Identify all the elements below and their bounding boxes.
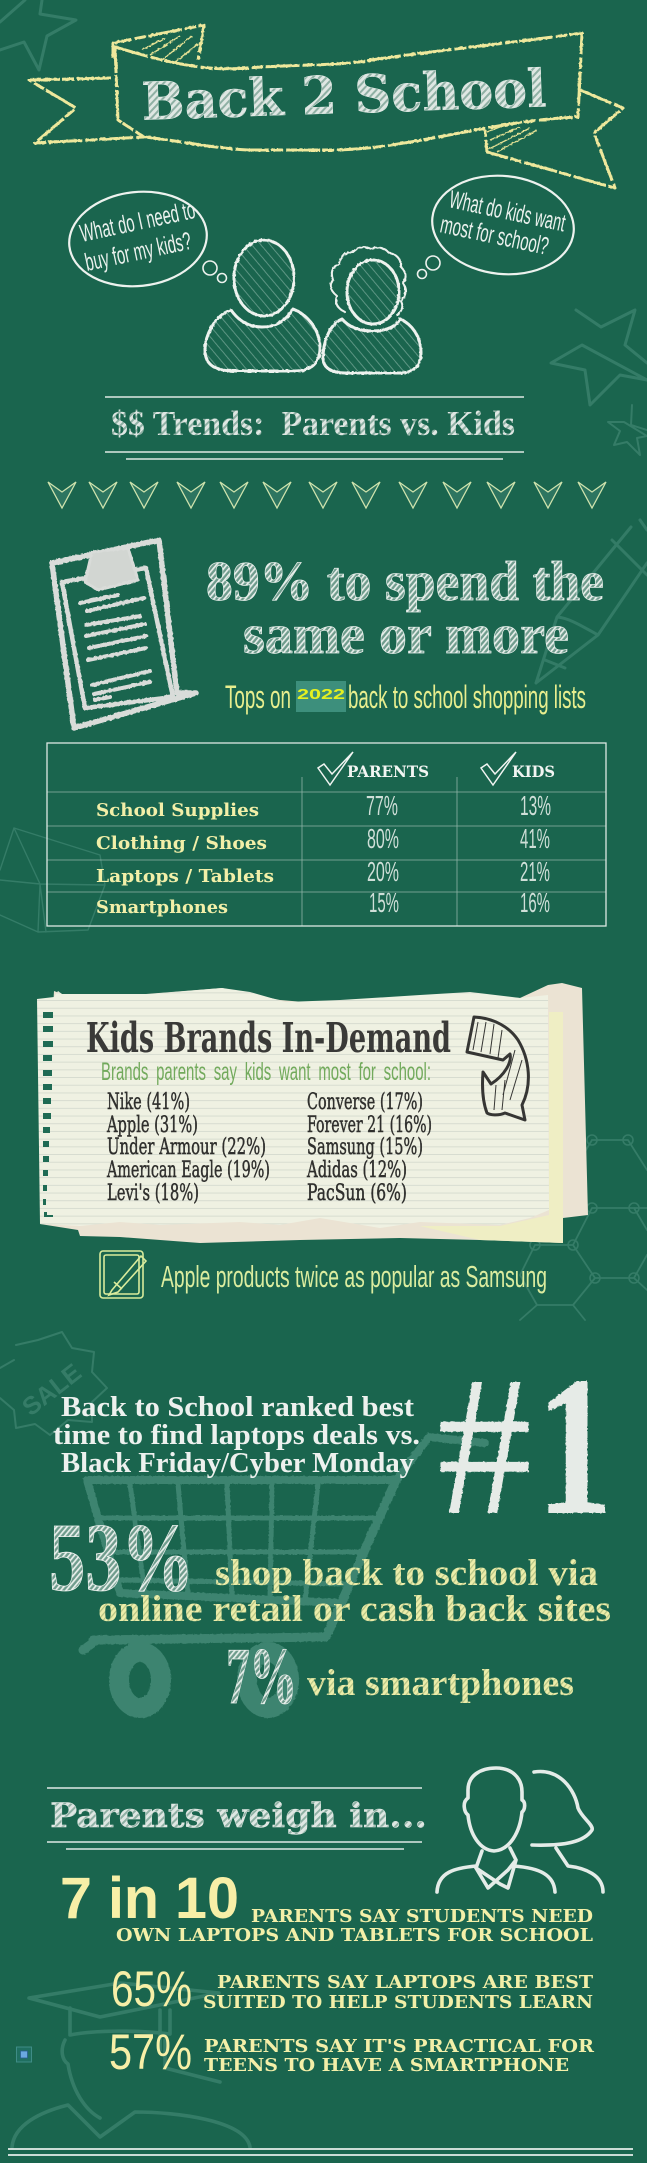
stat: 53%: online retail or cash back sites	[98, 1589, 611, 1630]
thought bubble: kid	[418, 169, 579, 281]
text: best time to find laptops: time to find laptops deals vs.	[53, 1419, 420, 1451]
decoration: graduate	[12, 1983, 250, 2147]
table	[47, 743, 606, 926]
stat: 7%	[226, 1633, 574, 1721]
stat: 7 in 10: PARENTS SAY STUDENTS NEED	[251, 1906, 593, 1927]
brand list: right column	[306, 1090, 432, 1206]
stat: 7 in 10: 7 in 10	[60, 1866, 239, 1931]
decoration: shopping cart	[83, 1437, 485, 1708]
table values: 16%	[520, 887, 550, 918]
table header: parents: PARENTS	[347, 762, 429, 781]
thought bubble: kid: most for school?	[438, 210, 551, 261]
stat: 57%: PARENTS SAY IT'S PRACTICAL FOR	[204, 2036, 595, 2057]
stat: 57%: TEENS TO HAVE A SMARTPHONE	[204, 2055, 569, 2076]
callout: apple vs samsung	[100, 1251, 547, 1298]
stat: 53%: 53%	[49, 1504, 194, 1612]
stat: #1	[437, 1336, 613, 1557]
stat: 7%: 7%	[226, 1633, 297, 1721]
icon: clipboard	[52, 540, 196, 728]
brand list: left column: Levi's (18%)	[107, 1181, 199, 1206]
table rows: Clothing / Shoes	[96, 833, 267, 854]
brand list: right column: PacSun (6%)	[307, 1181, 407, 1206]
table values: 21%	[520, 856, 550, 887]
table values: 13%	[520, 790, 551, 821]
brand list: left column: Under Armour (22%)	[107, 1135, 266, 1160]
stat: 65%	[111, 1961, 594, 2017]
table rows	[96, 800, 274, 918]
headline: 89%: same or more	[243, 604, 569, 666]
heading: parents weigh in	[47, 1788, 427, 1849]
icon: parent figure	[205, 240, 320, 371]
panel: torn notebook paper	[37, 983, 588, 1243]
banner ribbon outline	[29, 25, 623, 188]
text: best time to find laptops: Black Friday/Cyber Monday	[61, 1447, 414, 1479]
subtitle: trends: $$ Trends: Parents vs. Kids	[111, 404, 515, 443]
brand list: right column: Samsung (15%)	[307, 1135, 423, 1160]
stat: #1: #	[437, 1336, 532, 1557]
stat: 7 in 10: OWN LAPTOPS AND TABLETS FOR SCHOOL	[116, 1925, 593, 1946]
stat: 7%: via smartphones	[307, 1663, 574, 1704]
decoration: sale badge	[0, 1332, 107, 1435]
subheading: tops on 2022 lists	[225, 679, 586, 715]
footer lines	[8, 2149, 633, 2155]
table values: 15%	[369, 887, 399, 918]
decoration: hexagons	[520, 1135, 647, 1320]
stat: 65%: SUITED TO HELP STUDENTS LEARN	[203, 1992, 593, 2013]
icon: curved arrow	[467, 1017, 528, 1120]
stat: #1: 1	[536, 1336, 613, 1557]
paper main sheet	[37, 988, 549, 1228]
brand list: left column: American Eagle (19%)	[106, 1158, 270, 1183]
table rows: School Supplies	[96, 800, 259, 821]
table values: 80%	[367, 823, 399, 854]
icon: note and pen	[100, 1251, 146, 1298]
brand list: left column: Apple (31%)	[106, 1113, 198, 1138]
title: Back 2 School	[141, 58, 547, 133]
table values: 41%	[520, 823, 550, 854]
stat: 57%	[109, 2024, 595, 2080]
heading: parents weigh in: Parents weigh in...	[50, 1796, 427, 1836]
brand list: left column	[106, 1090, 270, 1206]
brand list: right column: Adidas (12%)	[306, 1158, 407, 1183]
table header: kids	[481, 752, 555, 785]
table grid	[47, 743, 606, 926]
brand list: right column: Forever 21 (16%)	[307, 1113, 432, 1138]
stat: 57%: 57%	[109, 2024, 192, 2080]
subtitle: trends	[105, 397, 524, 459]
headline: 89%: 89% to spend the	[206, 551, 604, 613]
table rows: Smartphones	[96, 897, 228, 918]
table values: 77%	[366, 790, 398, 821]
thought bubble: parent: buy for my kids?	[82, 227, 194, 277]
title banner	[29, 25, 623, 188]
table rows: Laptops / Tablets	[96, 866, 274, 887]
stat: 65%: 65%	[111, 1961, 192, 2017]
stat: 7 in 10	[60, 1866, 593, 1946]
icon: parents outline	[437, 1768, 603, 1892]
subheading: tops on 2022 lists: Tops on	[225, 679, 291, 715]
decoration: dice	[0, 828, 105, 932]
table header: kids: KIDS	[512, 762, 555, 781]
icon: small blue square	[16, 2047, 32, 2062]
table values	[366, 790, 551, 918]
thought bubble: parent: What do I need to	[77, 196, 198, 248]
text: best time to find laptops	[53, 1391, 420, 1479]
decoration: background stars	[0, 0, 647, 455]
decoration: sale badge: SALE	[17, 1358, 87, 1422]
table header: parents	[318, 752, 429, 785]
paper subheading: Brands parents say kids want most for school:	[101, 1058, 431, 1086]
stat: 53%	[49, 1504, 611, 1630]
banner fold hatching	[142, 36, 537, 152]
paper back layers	[40, 983, 588, 1243]
subheading: tops on 2022 lists: 2022	[297, 687, 345, 703]
paper heading: Kids Brands In-Demand	[86, 1014, 451, 1062]
table values: 20%	[367, 856, 399, 887]
thought bubble: parent	[64, 185, 226, 293]
headline: 89%	[206, 551, 604, 666]
brand list: left column: Nike (41%)	[107, 1090, 190, 1115]
chevron row	[48, 482, 606, 508]
text: best time to find laptops: Back to School ranked best	[61, 1391, 414, 1423]
stat: 65%: PARENTS SAY LAPTOPS ARE BEST	[217, 1972, 594, 1993]
thought bubble: kid: What do kids want	[447, 185, 568, 237]
decoration: pencil	[536, 520, 647, 683]
brand list: right column: Converse (17%)	[307, 1090, 423, 1115]
icon: kid figure	[323, 247, 421, 373]
stat: 53%: shop back to school via	[215, 1553, 598, 1594]
paper binding holes	[43, 1012, 53, 1217]
